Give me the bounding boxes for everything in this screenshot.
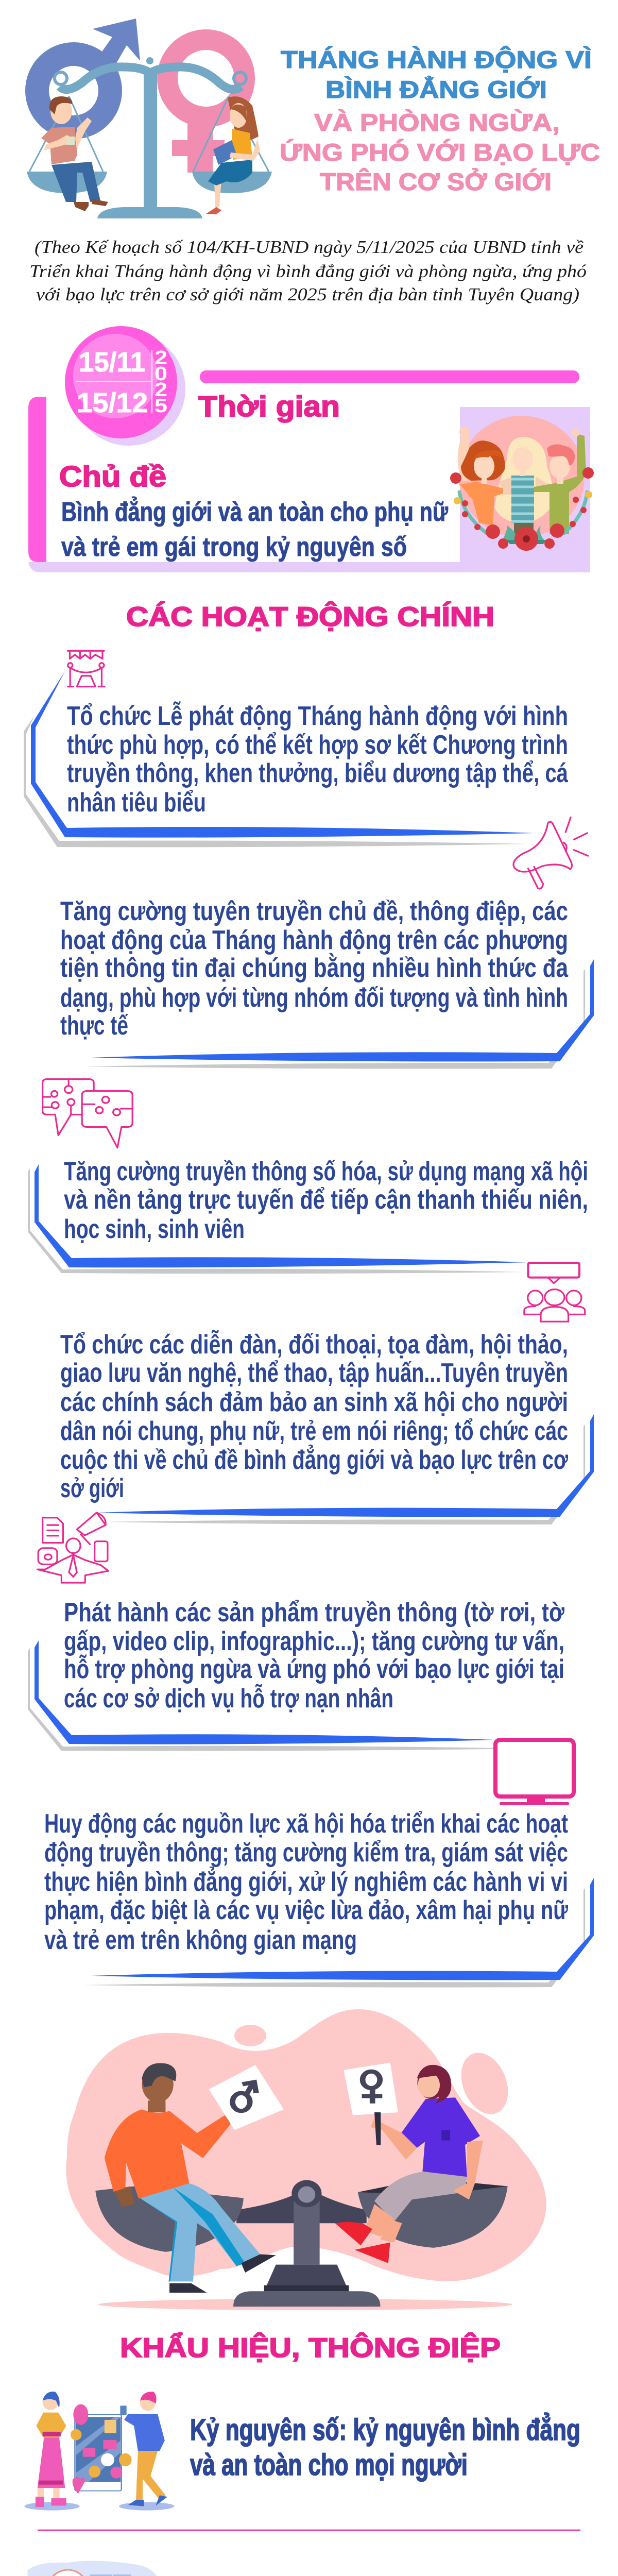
activity 2 [60,818,594,1069]
date circle: 2 [154,347,167,369]
title [280,46,600,195]
theme text [61,497,448,562]
activity 4: sở giới [60,1473,124,1503]
subtitle: Triển khai Tháng hành động vì bình đẳng giới và phòng ngừa, ứng phó [29,261,587,281]
subtitle [29,237,587,304]
activity 6: và trẻ em trên không gian mạng [44,1925,357,1955]
title: TRÊN CƠ SỞ GIỚI [320,168,552,195]
activity 6 [44,1740,594,1988]
illustration: people with phone [24,2392,174,2511]
date circle [65,326,185,446]
slogan 2 [14,2561,588,2576]
icon: megaphone [513,818,588,889]
title: VÀ PHÒNG NGỪA, [314,109,560,136]
slogan 1: và an toàn cho mọi người [190,2448,468,2482]
title: THÁNG HÀNH ĐỘNG VÌ [281,46,592,73]
icon: monitor [495,1740,574,1805]
activity 5 [28,1513,564,1751]
activity 2: thực tế [60,1011,128,1041]
date circle: 0 [154,363,167,385]
date circle: 2 [154,379,167,401]
woman figure [206,96,260,214]
theme text: Bình đẳng giới và an toàn cho phụ nữ [61,497,448,527]
heading: main activities: CÁC HOẠT ĐỘNG CHÍNH [126,601,494,632]
date circle: 15/12 [77,387,148,418]
activity 1: nhân tiêu biểu [67,788,206,818]
title: ỨNG PHÓ VỚI BẠO LỰC [280,139,600,166]
heading: slogans: KHẨU HIỆU, THÔNG ĐIỆP [120,2332,501,2363]
date circle: 5 [154,395,167,417]
icon: stage banner [68,651,105,687]
icon: speech bubble over group of people [524,1263,585,1321]
panel: time and theme [28,326,594,572]
scale [95,2180,508,2307]
man figure [41,96,108,211]
theme text: và trẻ em gái trong kỷ nguyên số [61,532,407,562]
icon: chat bubbles [43,1079,132,1148]
illustration: laptop with 18+ and gender symbols [14,2561,165,2576]
subtitle: (Theo Kế hoạch số 104/KH-UBND ngày 5/11/2025 của UBND tỉnh về [35,237,583,257]
icon: media products around a person [38,1513,108,1583]
man [105,2063,284,2293]
activity 1 [24,651,569,847]
activity 3: học sinh, sinh viên [64,1214,245,1244]
heading: theme: Chủ đề [59,460,166,493]
slogan 1 [24,2392,580,2511]
title: BÌNH ĐẲNG GIỚI [325,76,547,103]
illustration: man and woman on balance scale with gender symbols [27,19,272,218]
subtitle: với bạo lực trên cơ sở giới năm 2025 trên địa bàn tỉnh Tuyên Quang) [36,284,579,304]
activity 3 [28,1079,588,1274]
heading: time: Thời gian [198,390,340,423]
illustration: three women with floral wreath [450,416,594,551]
activity 5: các cơ sở dịch vụ hỗ trợ nạn nhân [64,1684,393,1714]
woman [335,2063,483,2263]
activity 4 [60,1263,594,1524]
date circle: 15/11 [79,347,145,378]
illustration: man and woman on grey scale holding gender signs [66,2009,546,2310]
